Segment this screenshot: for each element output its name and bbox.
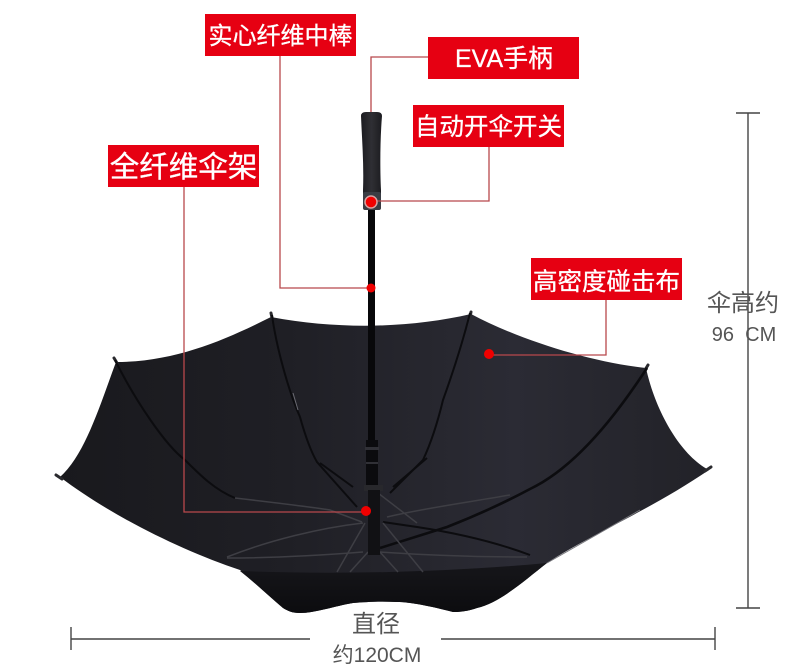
lower inner canopy [240,563,547,613]
height label: 伞高约 [707,290,779,317]
label: high density fabric [531,258,682,300]
umbrella [56,112,711,613]
height label [707,290,779,346]
width label [333,611,421,667]
height dimension line [736,113,760,608]
label: EVA handle [428,37,579,79]
label: auto open switch: 自动开伞开关 [415,113,562,141]
runner [364,440,383,555]
canopy [60,314,709,613]
height label: 96 CM [712,324,776,346]
callout lines [184,56,606,512]
label: solid fibre shaft [205,14,356,56]
switch ring [365,196,377,208]
label: EVA handle: EVA手柄 [455,45,553,73]
canopy lower edge highlight [547,510,640,563]
handle [361,112,382,210]
label: high density fabric: 高密度碰击布 [533,268,680,296]
stretchers [227,393,527,572]
width dimension line [71,627,715,650]
label: solid fibre shaft: 实心纤维中棒 [208,23,352,50]
label: auto open switch [413,105,564,147]
canopy tips [56,312,711,479]
width label: 直径 [352,611,400,638]
callout dots [361,284,494,516]
ribs [115,313,647,555]
label: full fibre frame: 全纤维伞架 [110,151,257,184]
shaft [368,210,375,450]
width label: 约120CM [333,644,421,667]
